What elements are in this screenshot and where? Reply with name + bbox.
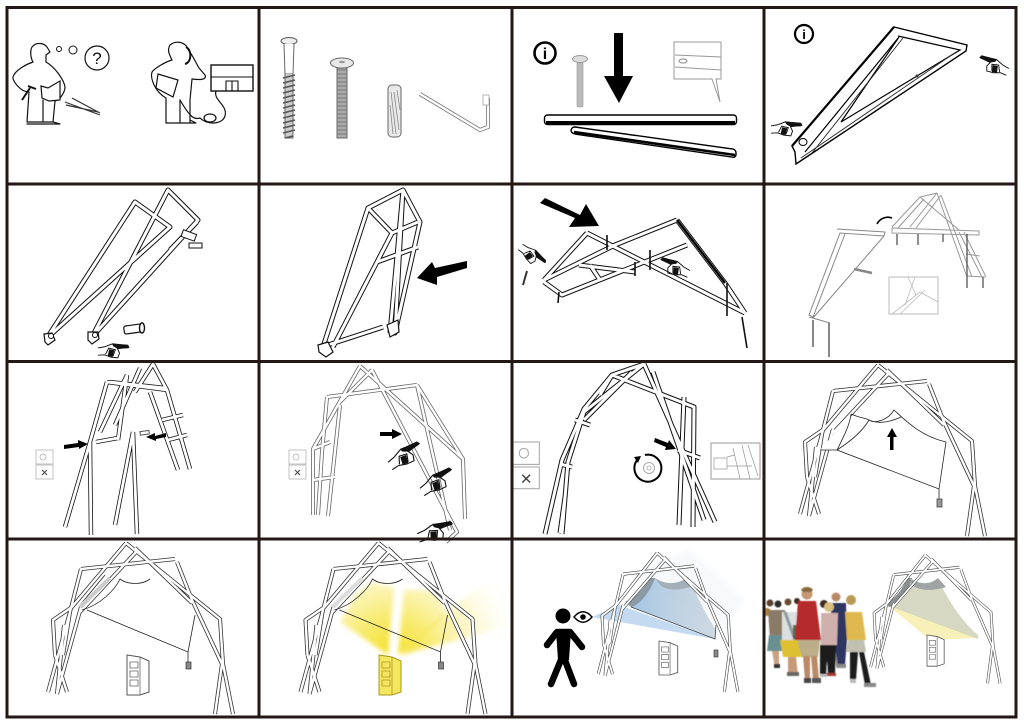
icon: pointing hand right [980, 56, 1009, 75]
icon: cabinet [659, 641, 678, 675]
arrow: left [146, 433, 166, 441]
icon: pointing hand [96, 336, 129, 364]
panel: frame connecting bolts [517, 198, 747, 348]
chart: yellow light rays [340, 570, 515, 655]
icon: info symbol [534, 42, 556, 64]
icon: arch frames [313, 366, 465, 542]
icon: hex key [420, 94, 489, 130]
person: red jacket man [795, 587, 821, 683]
chart: light through fabric [886, 578, 978, 640]
panel: viewer looking through fabric [547, 548, 745, 692]
arrow: diagonal [540, 198, 599, 227]
icon: right section [892, 193, 986, 288]
icon: person on phone [152, 42, 205, 123]
icon: arch frame [871, 555, 1000, 684]
icon: arch frame [48, 543, 233, 714]
panel: two sections joined (grey) [809, 193, 986, 357]
panel: arch with cabinet [48, 543, 233, 714]
panel: attach bars info [534, 33, 736, 157]
callout: bolt detail [711, 443, 760, 479]
panel: confused person and phone call [13, 42, 253, 124]
arrow: down [604, 33, 633, 103]
arrow: diagonal [654, 438, 676, 450]
icon: bolt [572, 56, 588, 107]
person: floral yellow woman [845, 595, 876, 687]
arrow: right [64, 440, 88, 449]
icon: eye [574, 612, 592, 622]
person: distant legs [820, 635, 840, 668]
icon: info symbol: i [543, 46, 547, 63]
icon: mini diagrams [289, 450, 306, 479]
icon: wooden dowel [388, 85, 401, 137]
icon: yellow cabinet [379, 655, 401, 695]
panel: arch with hands [289, 366, 465, 545]
icon: arch frame [598, 553, 738, 692]
icon: pointing hand right [517, 238, 546, 271]
icon: long bar lower [571, 127, 736, 157]
icon: wood screw [281, 38, 297, 138]
icon: fabric and string [80, 575, 195, 662]
icon: machine bolt [330, 58, 354, 138]
icon: fabric [820, 410, 946, 499]
person: background group [763, 598, 800, 668]
icon: arch frames [545, 364, 715, 534]
icon: hanging weight [937, 499, 942, 507]
icon: connector hardware [181, 230, 202, 248]
arrow: left [417, 261, 467, 285]
icon: curved arrow [877, 217, 892, 224]
icon: cabinet [127, 655, 149, 695]
icon: bolts [558, 235, 747, 348]
icon: hanging weight [438, 662, 444, 669]
panel: triangle frame [769, 25, 1009, 164]
icon: arch frame [300, 543, 486, 714]
icon: pointing hand left [661, 258, 690, 277]
icon: person silhouette [547, 608, 582, 684]
icon: screw [523, 271, 527, 285]
panel: frame with crossbar [318, 190, 467, 357]
icon: info symbol: i [802, 27, 806, 42]
icon: crowd of people [763, 587, 876, 687]
icon: hanging weight [714, 650, 718, 657]
icon: person thinking with hammer and manual [13, 43, 100, 124]
chart: blue view cone [592, 548, 745, 639]
person: navy man [830, 592, 847, 668]
icon: thought bubbles with question mark: ? [92, 49, 102, 68]
callout: bar detail [674, 42, 721, 102]
icon: cabinet [927, 635, 944, 666]
panel: tighten arch bolt [513, 364, 760, 534]
icon: frame [318, 190, 420, 357]
icon: frame [544, 220, 745, 313]
panel: arch with yellow light [300, 543, 515, 714]
icon: arch frames [65, 364, 190, 535]
icon: telephone call centre building [180, 65, 253, 123]
icon: fabric edge [631, 607, 716, 639]
icon: thought bubbles with question mark [56, 46, 109, 70]
icon: left section [809, 229, 885, 357]
icon: mini diagrams [513, 442, 539, 489]
panel: two linked frames [44, 190, 202, 364]
icon: hanging weight [186, 662, 191, 669]
icon: long bar upper [544, 115, 736, 124]
icon: pointing hands [385, 442, 455, 545]
icon: arch frame [800, 365, 985, 536]
icon: fabric and string [332, 578, 448, 662]
panel: fabric being raised [800, 365, 985, 536]
panel: crowd viewing installation [763, 555, 1000, 687]
arrow: up [887, 428, 897, 450]
icon: bolt spare [124, 323, 144, 334]
icon: rotate symbol [634, 455, 661, 482]
icon: bolt [140, 430, 149, 435]
panel: hardware parts [281, 38, 489, 138]
arrow: right [380, 429, 402, 439]
icon: mini diagrams [36, 450, 53, 479]
icon: frames [44, 190, 198, 345]
person: pink top woman [820, 600, 838, 677]
icon: triangular frame [792, 27, 967, 164]
panel: raising the arch [36, 364, 190, 535]
person: yellow skirt [780, 612, 804, 676]
icon: pointing hand left [769, 114, 802, 142]
icon: info symbol [795, 25, 813, 43]
callout: join detail [889, 277, 938, 314]
